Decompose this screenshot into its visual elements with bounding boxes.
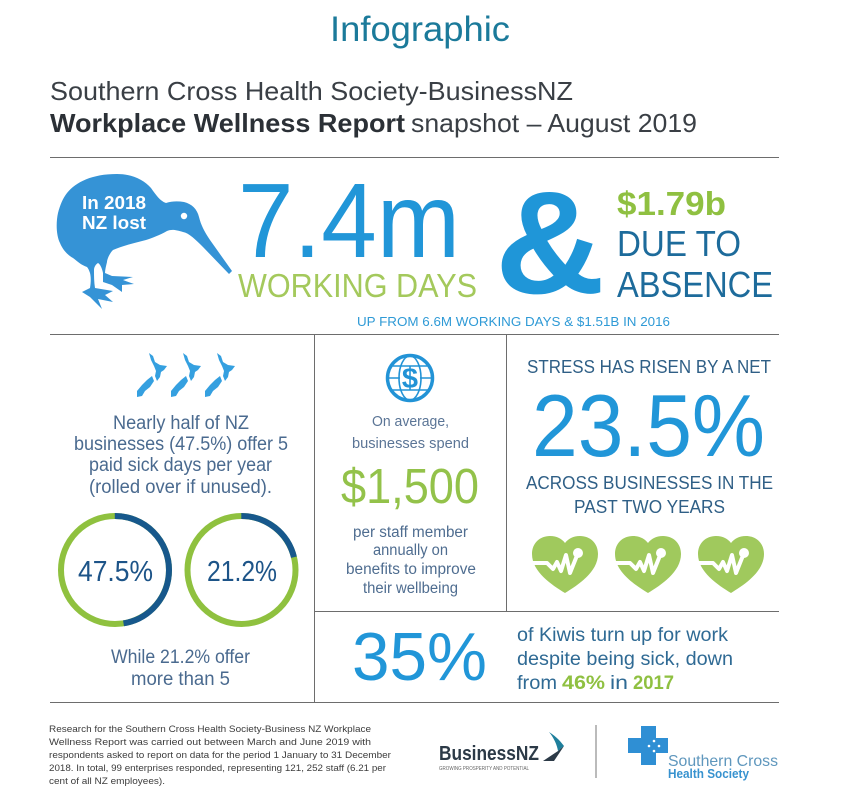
- sick days text: paid sick days per year: [89, 455, 273, 476]
- stress detail text: ACROSS BUSINESSES IN THE: [526, 472, 773, 493]
- more than 5 text: [111, 647, 251, 690]
- donut: 47.5%: [61, 516, 169, 624]
- label: due to absence: ABSENCE: [617, 264, 773, 305]
- kiwi label: In 2018: [82, 193, 146, 213]
- presenteeism text: [517, 624, 733, 694]
- presenteeism text: 46%: [562, 672, 605, 694]
- title: Infographic: [330, 10, 510, 49]
- panel: benefits spending: [341, 356, 479, 597]
- big number: 35%: 35%: [352, 619, 487, 695]
- spending detail text: annually on: [373, 542, 448, 559]
- panel: sick days: [61, 353, 296, 690]
- icon: globe with dollar: [388, 356, 432, 400]
- presenteeism text: of Kiwis turn up for work: [517, 624, 728, 646]
- label: due to absence: DUE TO: [617, 223, 741, 264]
- stress heading: STRESS HAS RISEN BY A NET: [527, 356, 771, 377]
- spending detail text: [346, 524, 476, 597]
- spending intro text: [352, 413, 469, 452]
- spending intro text: businesses spend: [352, 435, 469, 452]
- research footnote: [49, 724, 391, 787]
- donut: 21.2%: 21.2%: [207, 556, 277, 588]
- big number: working days lost: 7.4m: [238, 162, 460, 280]
- research footnote: Research for the Southern Cross Health Society-Business NZ Workplace: [49, 724, 371, 735]
- research footnote: Wellness Report was carried out between March and June 2019 with: [49, 737, 371, 748]
- presenteeism text: in: [610, 672, 628, 694]
- more than 5 text: While 21.2% offer: [111, 647, 251, 668]
- sick days text: [74, 413, 288, 498]
- stress detail text: PAST TWO YEARS: [574, 496, 725, 517]
- logo: BusinessNZ: [439, 732, 564, 772]
- label: due to absence: [617, 223, 773, 305]
- presenteeism text: from: [517, 672, 557, 694]
- donut: 47.5%: 47.5%: [78, 556, 153, 588]
- presenteeism text: despite being sick, down: [517, 648, 733, 670]
- spending detail text: benefits to improve: [346, 561, 476, 578]
- research footnote: 2018. In total, 99 enterprises responded, representing 121, 252 staff (6.21 per: [49, 763, 386, 774]
- label: working days: WORKING DAYS: [238, 267, 477, 304]
- icon: three NZ maps: [137, 353, 235, 397]
- ampersand: &: [495, 161, 605, 324]
- donut: 21.2%: [188, 516, 296, 624]
- sick days text: businesses (47.5%) offer 5: [74, 434, 288, 455]
- panel: headline absence figures: [57, 161, 773, 329]
- logo: Southern Cross Health Society: [628, 726, 778, 781]
- comparison note: UP FROM 6.6M WORKING DAYS & $1.51B IN 2016: [357, 314, 670, 329]
- icons: three hearts: [530, 536, 764, 593]
- logo: Southern Cross Health Society: Southern Cross: [668, 753, 778, 770]
- report heading: Workplace Wellness Report: [50, 108, 405, 138]
- logo: BusinessNZ: BusinessNZ: [439, 743, 539, 765]
- spending detail text: per staff member: [353, 524, 468, 541]
- presenteeism text: 2017: [633, 672, 674, 694]
- sick days text: (rolled over if unused).: [89, 477, 272, 498]
- big number: $1,500: $1,500: [341, 460, 479, 514]
- panel: stress: [526, 356, 773, 593]
- icon: kiwi: [57, 174, 232, 309]
- kiwi label: NZ lost: [82, 213, 146, 233]
- report heading: snapshot – August 2019: [411, 108, 697, 138]
- research footnote: respondents asked to report on data for the period 1 January to 31 December: [49, 750, 391, 761]
- stress detail text: [526, 472, 773, 517]
- kiwi label: [82, 193, 146, 233]
- spending detail text: their wellbeing: [363, 580, 458, 597]
- report heading: [50, 76, 697, 138]
- logo: BusinessNZ: GROWING PROSPERITY AND POTENTIAL: [439, 766, 529, 772]
- report heading: Southern Cross Health Society-BusinessNZ: [50, 76, 573, 106]
- spending intro text: On average,: [372, 413, 449, 430]
- sick days text: Nearly half of NZ: [113, 413, 249, 434]
- more than 5 text: more than 5: [131, 669, 230, 690]
- icon: globe with dollar: $: [402, 363, 418, 395]
- logo: Southern Cross Health Society: Health Society: [668, 767, 749, 781]
- panel: presenteeism: [352, 619, 733, 695]
- research footnote: cent of all NZ employees).: [49, 776, 165, 787]
- cost figure: $1.79b: [617, 185, 726, 222]
- big number: 23.5%: 23.5%: [532, 376, 765, 475]
